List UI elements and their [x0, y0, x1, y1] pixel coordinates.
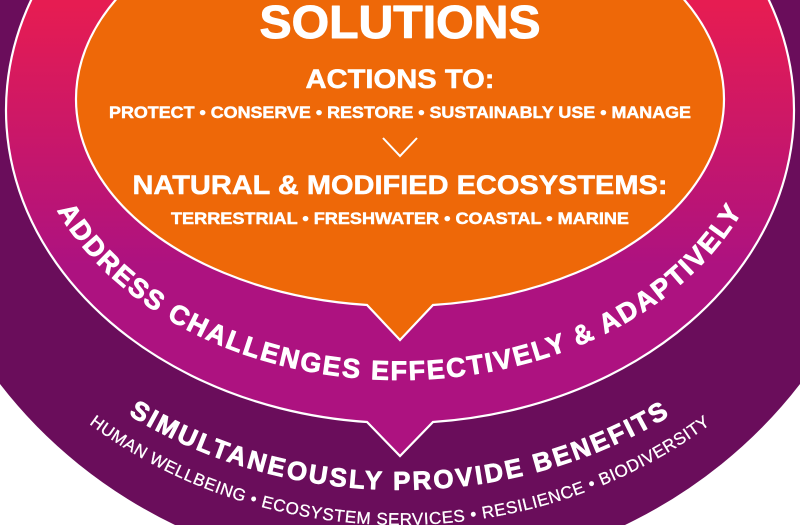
curved heading: provide benefits: SIMULTANEOUSLY PROVIDE BENEFITS — [130, 401, 668, 490]
text: ecosystem list: TERRESTRIAL • FRESHWATER • COASTAL • MARINE — [171, 209, 629, 228]
icon: chevron arrow — [383, 138, 417, 156]
heading: ecosystems: NATURAL & MODIFIED ECOSYSTEMS: — [132, 170, 668, 200]
heading: actions to: ACTIONS TO: — [306, 64, 494, 94]
text: action list: PROTECT • CONSERVE • RESTORE • SUSTAINABLY USE • MANAGE — [109, 103, 691, 122]
inner panel: solutions — [76, 0, 724, 340]
curved heading: address challenges: ADDRESS CHALLENGES EFFECTIVELY & ADAPTIVELY — [56, 202, 739, 380]
